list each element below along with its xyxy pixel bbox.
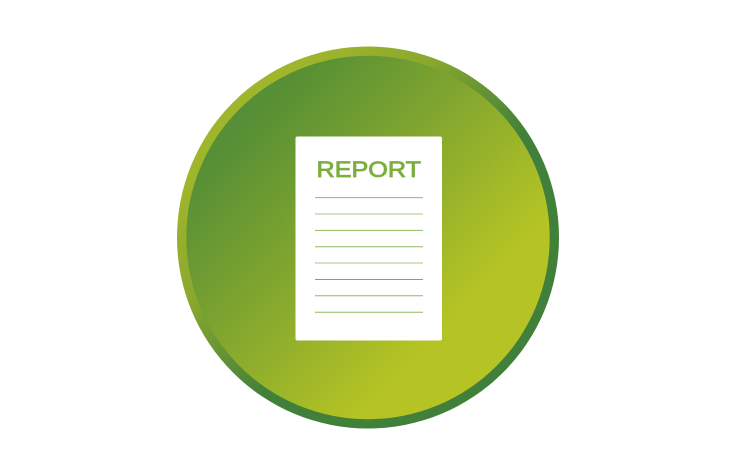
document sheet	[296, 136, 442, 340]
icon: report badge	[177, 46, 559, 428]
inner gradient disc	[186, 56, 550, 419]
outer gradient ring	[177, 46, 559, 428]
text lines	[315, 198, 423, 312]
report document	[296, 136, 442, 340]
heading: REPORT: REPORT	[316, 157, 421, 182]
